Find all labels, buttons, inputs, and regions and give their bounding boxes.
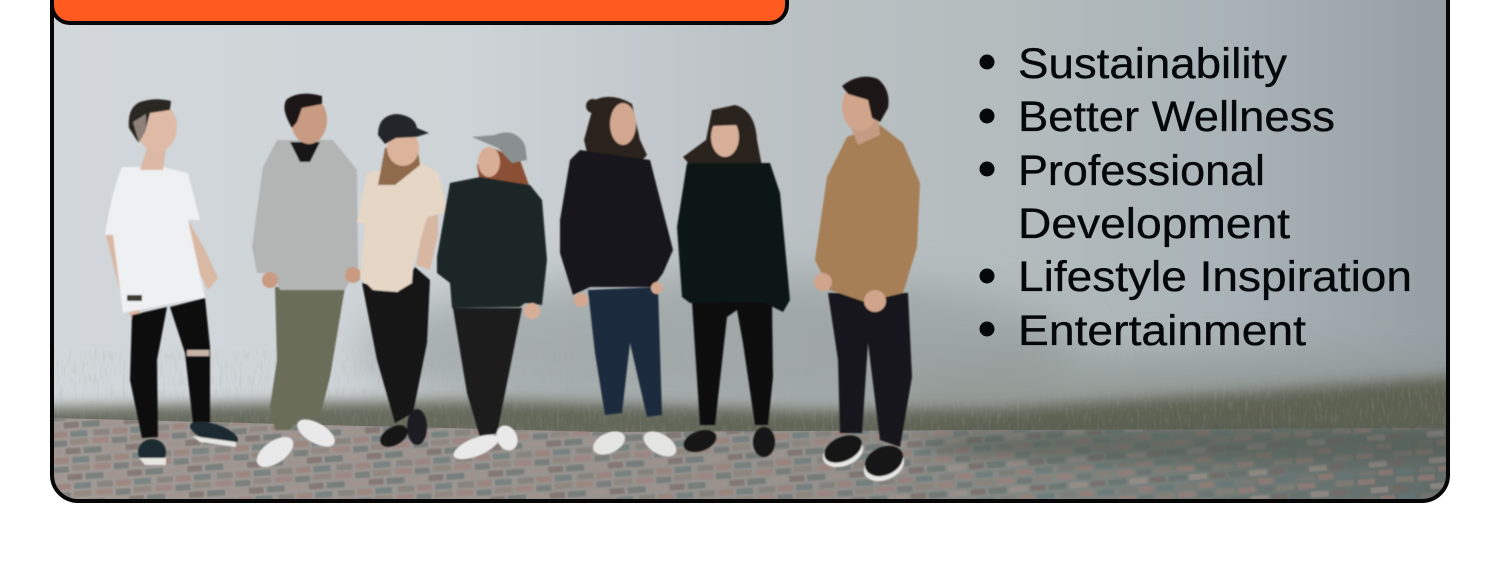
- orange title bar: [52, 0, 787, 23]
- wall grime band: [54, 369, 1446, 432]
- bullet item: Lifestyle Inspiration: Lifestyle Inspiration: [1018, 253, 1412, 301]
- bullet item: Professional Development: [980, 147, 1290, 248]
- person: man in white t-shirt: [105, 99, 241, 465]
- bullet item: Professional Development: Development: [1018, 200, 1290, 248]
- person: man in grey hoodie: [251, 94, 361, 473]
- wall mid shading: [360, 275, 1080, 425]
- wall shading right: [907, 345, 1438, 415]
- ground shadow near wall: [920, 427, 1500, 463]
- person: woman in beige t-shirt and black cap: [357, 114, 448, 451]
- cobblestones: [50, 418, 1450, 505]
- wall texture: [50, 350, 1450, 435]
- concrete wall: [50, 0, 1450, 435]
- bullet item: Sustainability: Sustainability: [1018, 40, 1288, 88]
- cobblestone ground: [50, 418, 1450, 505]
- bulleted list of interests: [980, 40, 1412, 355]
- person: woman in black sweater and grey cap: [437, 133, 547, 464]
- bullet item: Better Wellness: Better Wellness: [1018, 93, 1335, 141]
- person: woman in black sweater and leggings: [677, 105, 790, 457]
- person: woman in black sweater and jeans: [560, 97, 681, 462]
- bullet item: Professional Development: Professional: [1018, 147, 1265, 195]
- bullet item: Entertainment: Entertainment: [1018, 307, 1306, 355]
- person: man in tan hoodie: [814, 77, 920, 487]
